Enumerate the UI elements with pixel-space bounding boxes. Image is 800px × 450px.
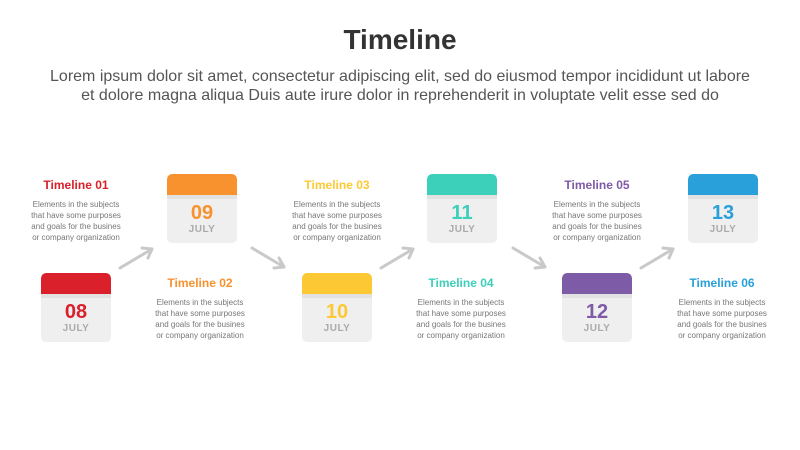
text: timeline 03: and goals for the busines	[292, 222, 382, 231]
text: timeline 02: or company organization	[156, 331, 244, 340]
calendar 11: JULY	[449, 224, 475, 235]
text: timeline 04: or company organization	[417, 331, 505, 340]
calendar 08: 08	[65, 301, 87, 323]
subtitle: et dolore magna aliqua Duis aute irure dolor in reprehenderit in voluptate velit esse sed do	[81, 87, 719, 104]
subtitle	[50, 68, 750, 104]
text: timeline 04: Elements in the subjects	[418, 298, 504, 307]
calendar 08: JULY	[63, 323, 89, 334]
text: timeline 04: that have some purposes	[416, 309, 506, 318]
text: timeline 06: or company organization	[678, 331, 766, 340]
calendar 13	[688, 174, 758, 243]
calendar 11	[427, 174, 497, 243]
title: Timeline	[343, 24, 457, 55]
text: timeline 02: Timeline 02	[167, 276, 233, 290]
text: timeline 03: Elements in the subjects	[294, 200, 380, 209]
calendar 10: 10	[326, 301, 348, 323]
text: timeline 06: that have some purposes	[677, 309, 767, 318]
calendar 12: 12	[586, 301, 608, 323]
text: timeline 01	[31, 178, 121, 242]
arrow 3	[381, 248, 413, 268]
calendar 09: 09	[191, 202, 213, 224]
text: timeline 01: or company organization	[32, 233, 120, 242]
text: timeline 06: Elements in the subjects	[679, 298, 765, 307]
text: timeline 01: that have some purposes	[31, 211, 121, 220]
text: timeline 05	[552, 178, 642, 242]
arrow 2	[252, 248, 284, 268]
text: timeline 02: and goals for the busines	[155, 320, 245, 329]
text: timeline 04: and goals for the busines	[416, 320, 506, 329]
text: timeline 05: Elements in the subjects	[554, 200, 640, 209]
text: timeline 05: or company organization	[553, 233, 641, 242]
text: timeline 03: or company organization	[293, 233, 381, 242]
text: timeline 03: that have some purposes	[292, 211, 382, 220]
text: timeline 01: Timeline 01	[43, 178, 109, 192]
arrow 4	[513, 248, 545, 268]
text: timeline 06: and goals for the busines	[677, 320, 767, 329]
text: timeline 01: and goals for the busines	[31, 222, 121, 231]
calendar 12	[562, 273, 632, 342]
text: timeline 02: that have some purposes	[155, 309, 245, 318]
arrow 1	[120, 248, 152, 268]
text: timeline 03: Timeline 03	[304, 178, 370, 192]
subtitle: Lorem ipsum dolor sit amet, consectetur adipiscing elit, sed do eiusmod tempor incididunt ut labore	[50, 68, 750, 85]
text: timeline 05: that have some purposes	[552, 211, 642, 220]
calendar 08	[41, 273, 111, 342]
text: timeline 03	[292, 178, 382, 242]
calendar 09	[167, 174, 237, 243]
calendar 10	[302, 273, 372, 342]
text: timeline 06: Timeline 06	[689, 276, 755, 290]
calendar 10: JULY	[324, 323, 350, 334]
text: timeline 01: Elements in the subjects	[33, 200, 119, 209]
text: timeline 04	[416, 276, 506, 340]
calendar 09: JULY	[189, 224, 215, 235]
calendar 12: JULY	[584, 323, 610, 334]
calendar 13: 13	[712, 202, 734, 224]
text: timeline 02	[155, 276, 245, 340]
calendar 11: 11	[451, 202, 473, 224]
text: timeline 04: Timeline 04	[428, 276, 494, 290]
text: timeline 05: Timeline 05	[564, 178, 630, 192]
text: timeline 05: and goals for the busines	[552, 222, 642, 231]
calendar 13: JULY	[710, 224, 736, 235]
arrow 5	[641, 248, 673, 268]
text: timeline 06	[677, 276, 767, 340]
text: timeline 02: Elements in the subjects	[157, 298, 243, 307]
